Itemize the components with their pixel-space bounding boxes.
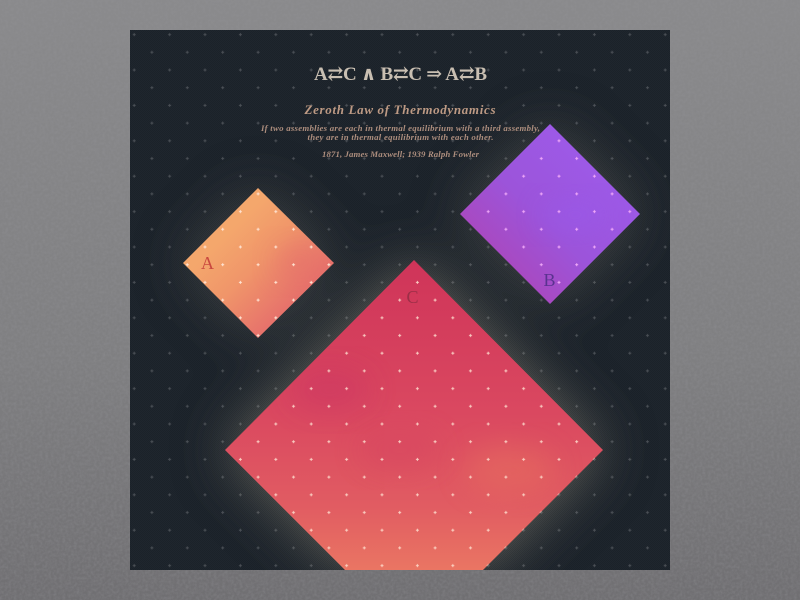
label B: B	[543, 270, 556, 290]
label C: C	[406, 287, 419, 307]
label A: A	[201, 253, 214, 273]
title: Zeroth Law of Thermodynamics: Zeroth Law of Thermodynamics	[304, 102, 496, 117]
description text: If two assemblies are each in thermal equilibrium with a third assembly,	[260, 123, 540, 133]
glow behind diamonds	[183, 124, 640, 568]
equation heading: A⇄C ∧ B⇄C ⇒ A⇄B	[314, 64, 487, 85]
diamond A	[180, 185, 337, 341]
attribution: 1871, James Maxwell; 1939 Ralph Fowler	[322, 149, 480, 159]
description text: they are in thermal equilibrium with each other.	[308, 132, 494, 142]
diamond B	[458, 122, 642, 306]
description text	[260, 123, 540, 142]
diamond C	[222, 258, 606, 570]
dark panel	[130, 30, 670, 570]
